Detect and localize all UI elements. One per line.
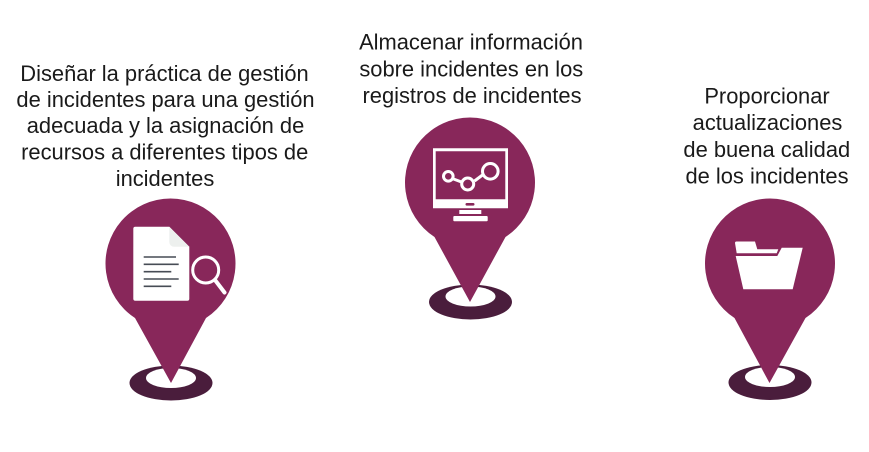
text block: provide updates: de buena calidad: [683, 137, 850, 162]
icon: folder: [735, 242, 803, 289]
text block: design practice: [16, 61, 315, 191]
text block: provide updates: [683, 84, 850, 188]
pin: document search: [105, 199, 236, 400]
text block: provide updates: actualizaciones: [693, 110, 842, 135]
text block: store information: Almacenar información: [359, 30, 583, 54]
pin: folder: [705, 199, 835, 400]
icon: magnifier: [193, 257, 224, 292]
pin: monitor chart: [405, 118, 535, 319]
text block: design practice: incidentes: [116, 166, 214, 191]
text block: store information: sobre incidentes en los: [359, 56, 583, 82]
text block: store information: [359, 30, 583, 108]
text block: provide updates: de los incidentes: [685, 164, 849, 188]
icon: document: [133, 227, 189, 301]
text block: provide updates: Proporcionar: [704, 84, 830, 108]
icon: line chart: [444, 164, 498, 190]
text block: store information: registros de incidentes: [362, 83, 582, 108]
text block: design practice: Diseñar la práctica de gestión: [20, 61, 309, 86]
text block: design practice: de incidentes para una gestión: [16, 87, 315, 112]
text block: design practice: recursos a diferentes tipos de: [21, 140, 308, 164]
icon: monitor: [433, 148, 508, 221]
text block: design practice: adecuada y la asignación de: [27, 113, 304, 138]
